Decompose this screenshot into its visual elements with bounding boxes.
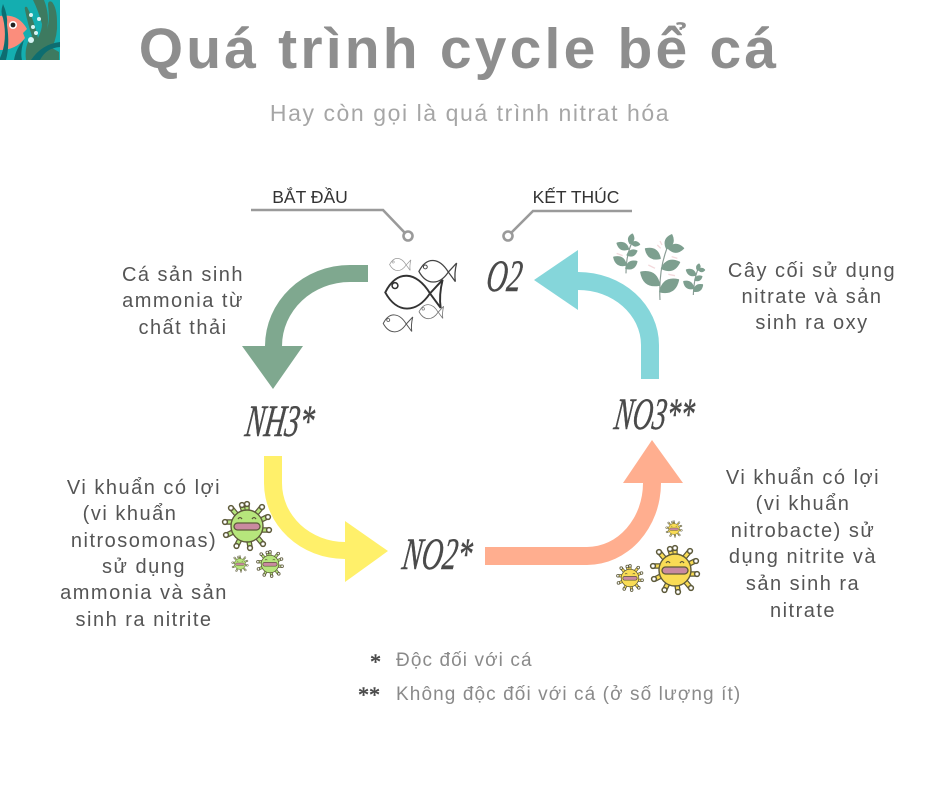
arrow: green, fish to NH3 (242, 265, 368, 389)
text: nitrobacte: sản sinh ra (746, 573, 860, 595)
text: nitrosomonas: ammonia và sản (60, 582, 228, 604)
text: nitrobacte (726, 467, 880, 622)
text: plants use nitrate: sinh ra oxy (755, 312, 869, 334)
formula: NO3: NO3** (611, 389, 698, 439)
formula: NH3: NH3* (242, 396, 318, 446)
text: nitrosomonas: Vi khuẩn có lợi (67, 477, 221, 499)
title: Quá trình cycle bể cá (139, 17, 779, 81)
text: nitrobacte: dụng nitrite và (729, 546, 877, 568)
text: fish produce ammonia: ammonia từ (122, 290, 244, 312)
text: nitrosomonas: nitrosomonas) (71, 530, 217, 552)
arrow: yellow, NH3 to NO2 (264, 456, 388, 582)
text: plants use nitrate (728, 260, 896, 334)
icon: school of fish (383, 258, 457, 332)
icon: plants (614, 234, 704, 300)
arrow: salmon, NO2 to NO3 (485, 440, 683, 565)
text: fish produce ammonia: chất thải (138, 317, 228, 339)
text: nitrobacte: (vi khuẩn (756, 493, 850, 515)
text: nitrosomonas: (vi khuẩn (83, 503, 177, 525)
legend: Không độc đối với cá (ở số lượng ít) (396, 684, 741, 705)
legend: Độc đối với cá (396, 650, 533, 671)
text: nitrosomonas: sinh ra nitrite (76, 609, 212, 631)
icon: fish logo (0, 0, 60, 60)
callout: start label: BẮT ĐẦU (272, 186, 348, 207)
arrow: teal, NO3 to O2 (534, 250, 659, 379)
text: nitrobacte: nitrobacte) sử (731, 520, 875, 542)
text: nitrosomonas (60, 477, 228, 631)
formula: NO2: NO2* (399, 529, 476, 579)
text: fish produce ammonia: Cá sản sinh (122, 264, 244, 286)
callout: start label (251, 186, 412, 240)
text: nitrobacte: Vi khuẩn có lợi (726, 467, 880, 489)
formula: O2: O2 (484, 251, 526, 301)
text: nitrosomonas: sử dụng (102, 556, 186, 578)
text: plants use nitrate: nitrate và sản (741, 286, 883, 308)
text: fish produce ammonia (122, 264, 244, 339)
legend: ** (357, 682, 379, 707)
legend: * (369, 649, 380, 674)
callout: end label: KẾT THÚC (533, 186, 619, 207)
icon: green bacteria (223, 502, 283, 577)
legend (357, 649, 741, 707)
text: plants use nitrate: Cây cối sử dụng (728, 260, 896, 282)
icon: yellow bacteria (617, 521, 699, 594)
text: nitrobacte: nitrate (770, 600, 836, 622)
callout: end label (504, 186, 632, 240)
subtitle: Hay còn gọi là quá trình nitrat hóa (270, 100, 670, 126)
